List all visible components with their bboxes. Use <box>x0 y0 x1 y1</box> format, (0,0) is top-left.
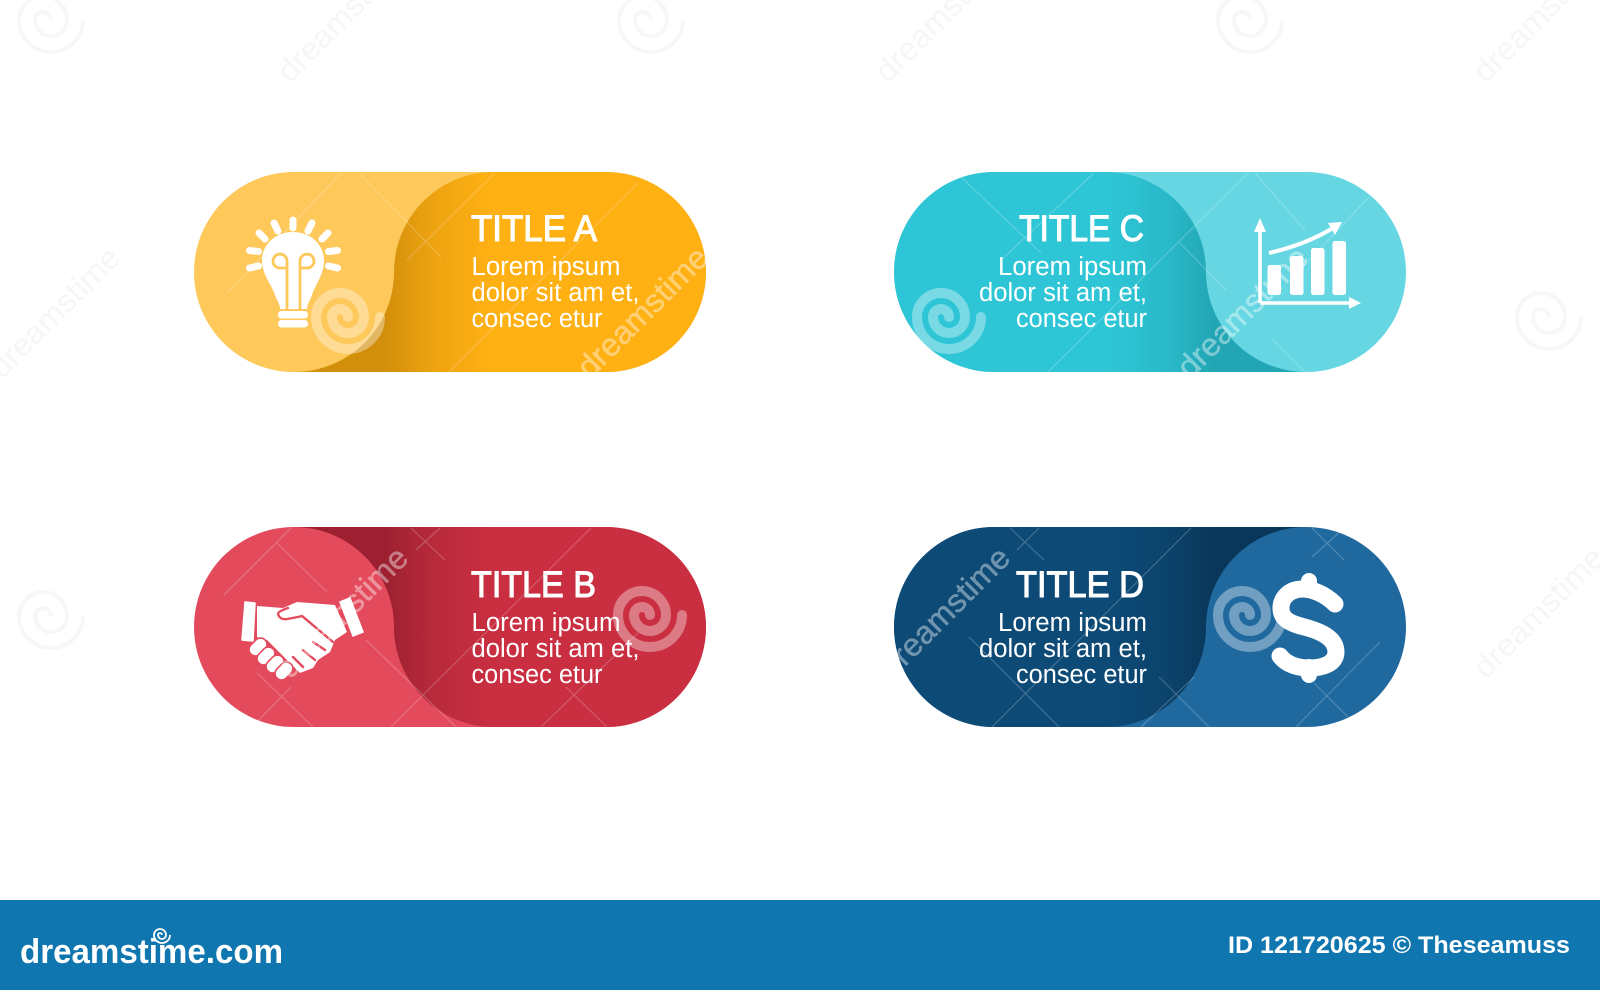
watermark text: dreamstime <box>269 539 415 685</box>
icon: growth chart <box>1254 218 1361 309</box>
watermark spiral <box>618 591 682 647</box>
watermark text: dreamstime <box>569 239 715 385</box>
title: TITLE A <box>471 208 597 249</box>
dark red overlapping shape <box>294 527 706 727</box>
dark yellow overlapping shape <box>294 172 706 372</box>
icon: light bulb <box>250 220 338 328</box>
watermark lines <box>227 173 638 372</box>
body text: dolor sit am et, <box>979 279 1147 307</box>
body text <box>979 609 1147 689</box>
icon: handshake <box>242 598 363 683</box>
pill base: light yellow <box>194 172 706 372</box>
panel: Title C (teal) <box>894 172 1406 385</box>
watermark spiral <box>917 293 981 349</box>
fold shadow <box>894 172 1306 372</box>
icon: dollar sign <box>1280 581 1336 675</box>
watermark spiral <box>316 293 380 349</box>
title: TITLE C <box>1019 208 1144 249</box>
body text: Lorem ipsum <box>472 253 620 281</box>
body text: Lorem ipsum <box>998 253 1147 281</box>
body text <box>472 609 640 689</box>
footer bar <box>0 900 1600 990</box>
pill base: light teal <box>894 172 1406 372</box>
body text: consec etur <box>472 305 603 333</box>
body text: dolor sit am et, <box>472 635 640 663</box>
panel: Title D (navy) <box>871 527 1406 727</box>
dark teal overlapping shape <box>894 172 1306 372</box>
body text: Lorem ipsum <box>998 609 1147 637</box>
fold shadow <box>294 527 706 727</box>
footer logo: dreamstime.com <box>20 933 283 971</box>
fold shadow <box>894 527 1306 727</box>
watermark text: dreamstime <box>1169 239 1315 385</box>
watermark lines <box>962 173 1369 372</box>
pill base: light blue <box>894 527 1406 727</box>
watermark lines <box>224 528 638 727</box>
body text: Lorem ipsum <box>472 609 620 637</box>
watermark lines <box>969 528 1380 727</box>
panel: Title A (yellow) <box>194 172 715 385</box>
dark navy overlapping shape <box>894 527 1306 727</box>
body text: dolor sit am et, <box>979 635 1147 663</box>
body text: consec etur <box>1016 305 1147 333</box>
watermark spiral <box>1218 591 1282 647</box>
body text: consec etur <box>472 661 603 689</box>
body text: dolor sit am et, <box>472 279 640 307</box>
title: TITLE D <box>1016 564 1144 605</box>
pill base: light red <box>194 527 706 727</box>
footer credit: ID 121720625 © Theseamuss <box>1228 932 1570 959</box>
panel: Title B (red) <box>194 527 706 727</box>
watermark text: dreamstime <box>871 539 1017 685</box>
body text: consec etur <box>1016 661 1147 689</box>
title: TITLE B <box>471 564 596 605</box>
fold shadow <box>294 172 706 372</box>
body text <box>472 253 640 333</box>
body text <box>979 253 1147 333</box>
background watermarks <box>0 0 1600 685</box>
